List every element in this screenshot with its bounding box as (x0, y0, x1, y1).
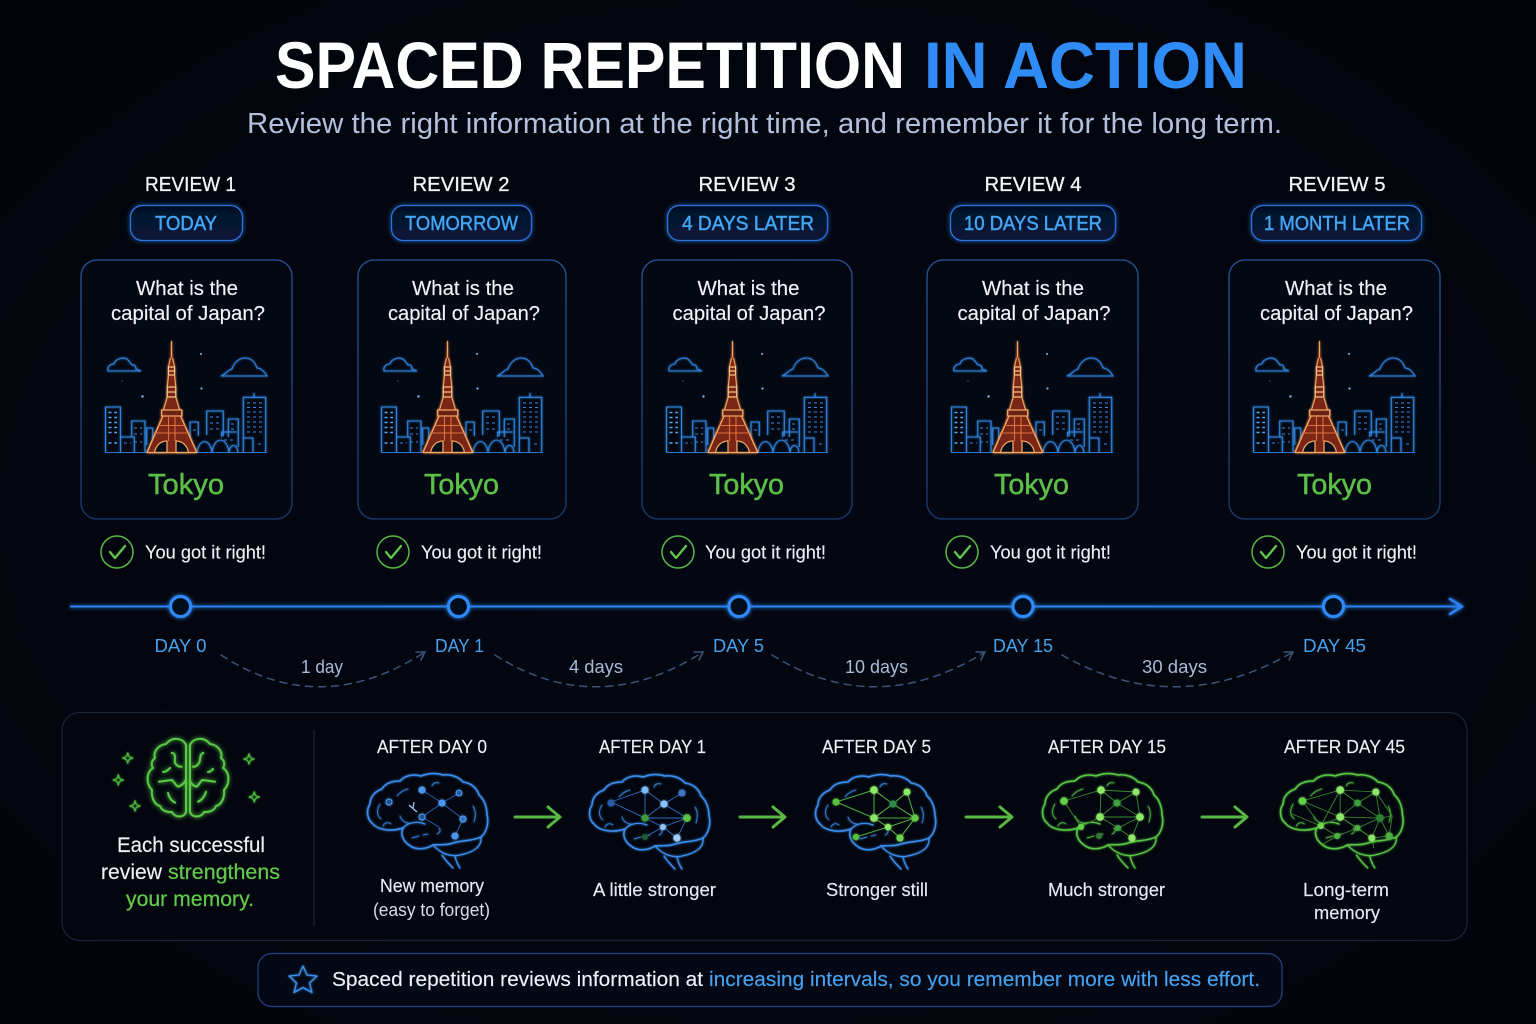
stage: after day 45 (1281, 737, 1405, 923)
check result (1252, 536, 1417, 568)
flashcard: Tokyo (148, 469, 224, 501)
check result (101, 536, 266, 568)
check result (377, 536, 542, 568)
flashcard: Tokyo (709, 469, 784, 501)
subtitle: Review the right information at the right time, and remember it for the long term. (247, 108, 1282, 140)
timing pill: 10 DAYS LATER (964, 213, 1102, 235)
column: review 4 (927, 174, 1138, 568)
timing pill: 4 DAYS LATER (682, 213, 814, 235)
check result: You got it right! (145, 542, 266, 562)
check result: You got it right! (1296, 542, 1417, 562)
review heading: REVIEW 2 (412, 174, 510, 196)
flashcard: What is the (1285, 278, 1387, 300)
icon: blue brain with first green nodes (590, 775, 710, 869)
stage: after day 15: Much stronger (1048, 880, 1165, 900)
icon: green brain (1043, 774, 1163, 868)
stage: after day 5 (816, 737, 936, 900)
stage: after day 0: (easy to forget) (373, 900, 490, 920)
summary text: increasing intervals, so you remember more with less effort. (709, 968, 1260, 991)
flashcard (642, 260, 852, 519)
day labels: DAY 5 (713, 636, 764, 656)
check result (662, 536, 826, 568)
timing pill (130, 206, 242, 240)
arrow (515, 807, 560, 827)
flashcard: Tokyo (994, 469, 1069, 501)
memory caption: your memory. (126, 888, 254, 911)
check result (946, 536, 1111, 568)
review heading: REVIEW 1 (145, 174, 236, 196)
timeline (70, 596, 1462, 687)
timing pill (950, 206, 1116, 240)
stage: after day 1: A little stronger (593, 880, 716, 900)
flashcard: capital of Japan? (958, 303, 1110, 325)
memory caption (101, 834, 280, 911)
timing pill (668, 206, 828, 240)
day labels: DAY 45 (1303, 636, 1366, 656)
day labels: DAY 15 (993, 636, 1053, 656)
title: IN ACTION (924, 28, 1247, 102)
column: review 1 (81, 174, 292, 568)
stage: after day 15: AFTER DAY 15 (1048, 737, 1166, 757)
icon: green brain with sparkles (113, 739, 260, 816)
stage: after day 5: Stronger still (826, 880, 928, 900)
stage: after day 45: Long-term (1303, 880, 1389, 900)
icon: dense green brain (1281, 774, 1403, 868)
stage: after day 45: AFTER DAY 45 (1284, 737, 1405, 757)
flashcard: What is the (136, 278, 238, 300)
summary text: Spaced repetition reviews information at (332, 968, 703, 991)
timing pill (392, 206, 532, 240)
arrow (966, 807, 1012, 827)
stage: after day 15 (1043, 737, 1166, 900)
interval labels: 1 day (301, 657, 343, 677)
column: review 3 (642, 174, 852, 568)
stage: after day 1 (590, 737, 716, 900)
stage: after day 0: AFTER DAY 0 (377, 737, 487, 757)
flashcard (358, 260, 566, 519)
arrow (740, 807, 785, 827)
interval labels: 30 days (1142, 657, 1207, 677)
memory caption: Each successful (117, 834, 265, 857)
check result: You got it right! (705, 542, 826, 562)
flashcard (81, 260, 292, 519)
flashcard: Tokyo (424, 469, 499, 501)
timing pill: TODAY (155, 213, 217, 235)
interval labels: 10 days (845, 657, 908, 677)
panel: memory strength (62, 712, 1467, 940)
icon: blue brain with green network (816, 775, 936, 869)
flashcard: capital of Japan? (672, 303, 826, 325)
icon: blue brain (368, 774, 488, 868)
flashcard: capital of Japan? (388, 303, 540, 325)
summary text (332, 968, 1260, 991)
flashcard: What is the (412, 278, 514, 300)
interval arrows (221, 652, 1293, 687)
review heading: REVIEW 3 (698, 174, 796, 196)
column: review 2 (358, 174, 566, 568)
icon: star (289, 966, 317, 992)
stage: after day 0 (368, 737, 490, 920)
review heading: REVIEW 4 (984, 174, 1082, 196)
flashcard: capital of Japan? (111, 303, 265, 325)
check result: You got it right! (421, 542, 542, 562)
stage: after day 45: memory (1314, 903, 1380, 923)
interval labels: 4 days (569, 657, 623, 677)
interval labels (301, 657, 1207, 677)
column: review 5 (1229, 174, 1440, 568)
timing pill: TOMORROW (405, 213, 518, 235)
stage: after day 1: AFTER DAY 1 (599, 737, 706, 757)
callout: summary (258, 954, 1282, 1006)
day labels (154, 636, 1366, 656)
stage: after day 5: AFTER DAY 5 (822, 737, 931, 757)
arrow (1202, 807, 1247, 827)
flashcard: capital of Japan? (1260, 303, 1413, 325)
flashcard: What is the (698, 278, 800, 300)
day labels: DAY 1 (435, 636, 484, 656)
review heading: REVIEW 5 (1288, 174, 1386, 196)
memory caption: strengthens (168, 861, 280, 884)
flashcard: What is the (982, 278, 1084, 300)
check result: You got it right! (990, 542, 1111, 562)
timing pill: 1 MONTH LATER (1264, 213, 1410, 235)
title: SPACED REPETITION (275, 28, 905, 102)
day labels: DAY 0 (154, 636, 206, 656)
flashcard (1229, 260, 1440, 519)
flashcard: Tokyo (1297, 469, 1372, 501)
memory caption: review (101, 861, 163, 884)
stage: after day 0: New memory (380, 876, 484, 896)
timing pill (1252, 206, 1422, 240)
flashcard (927, 260, 1138, 519)
